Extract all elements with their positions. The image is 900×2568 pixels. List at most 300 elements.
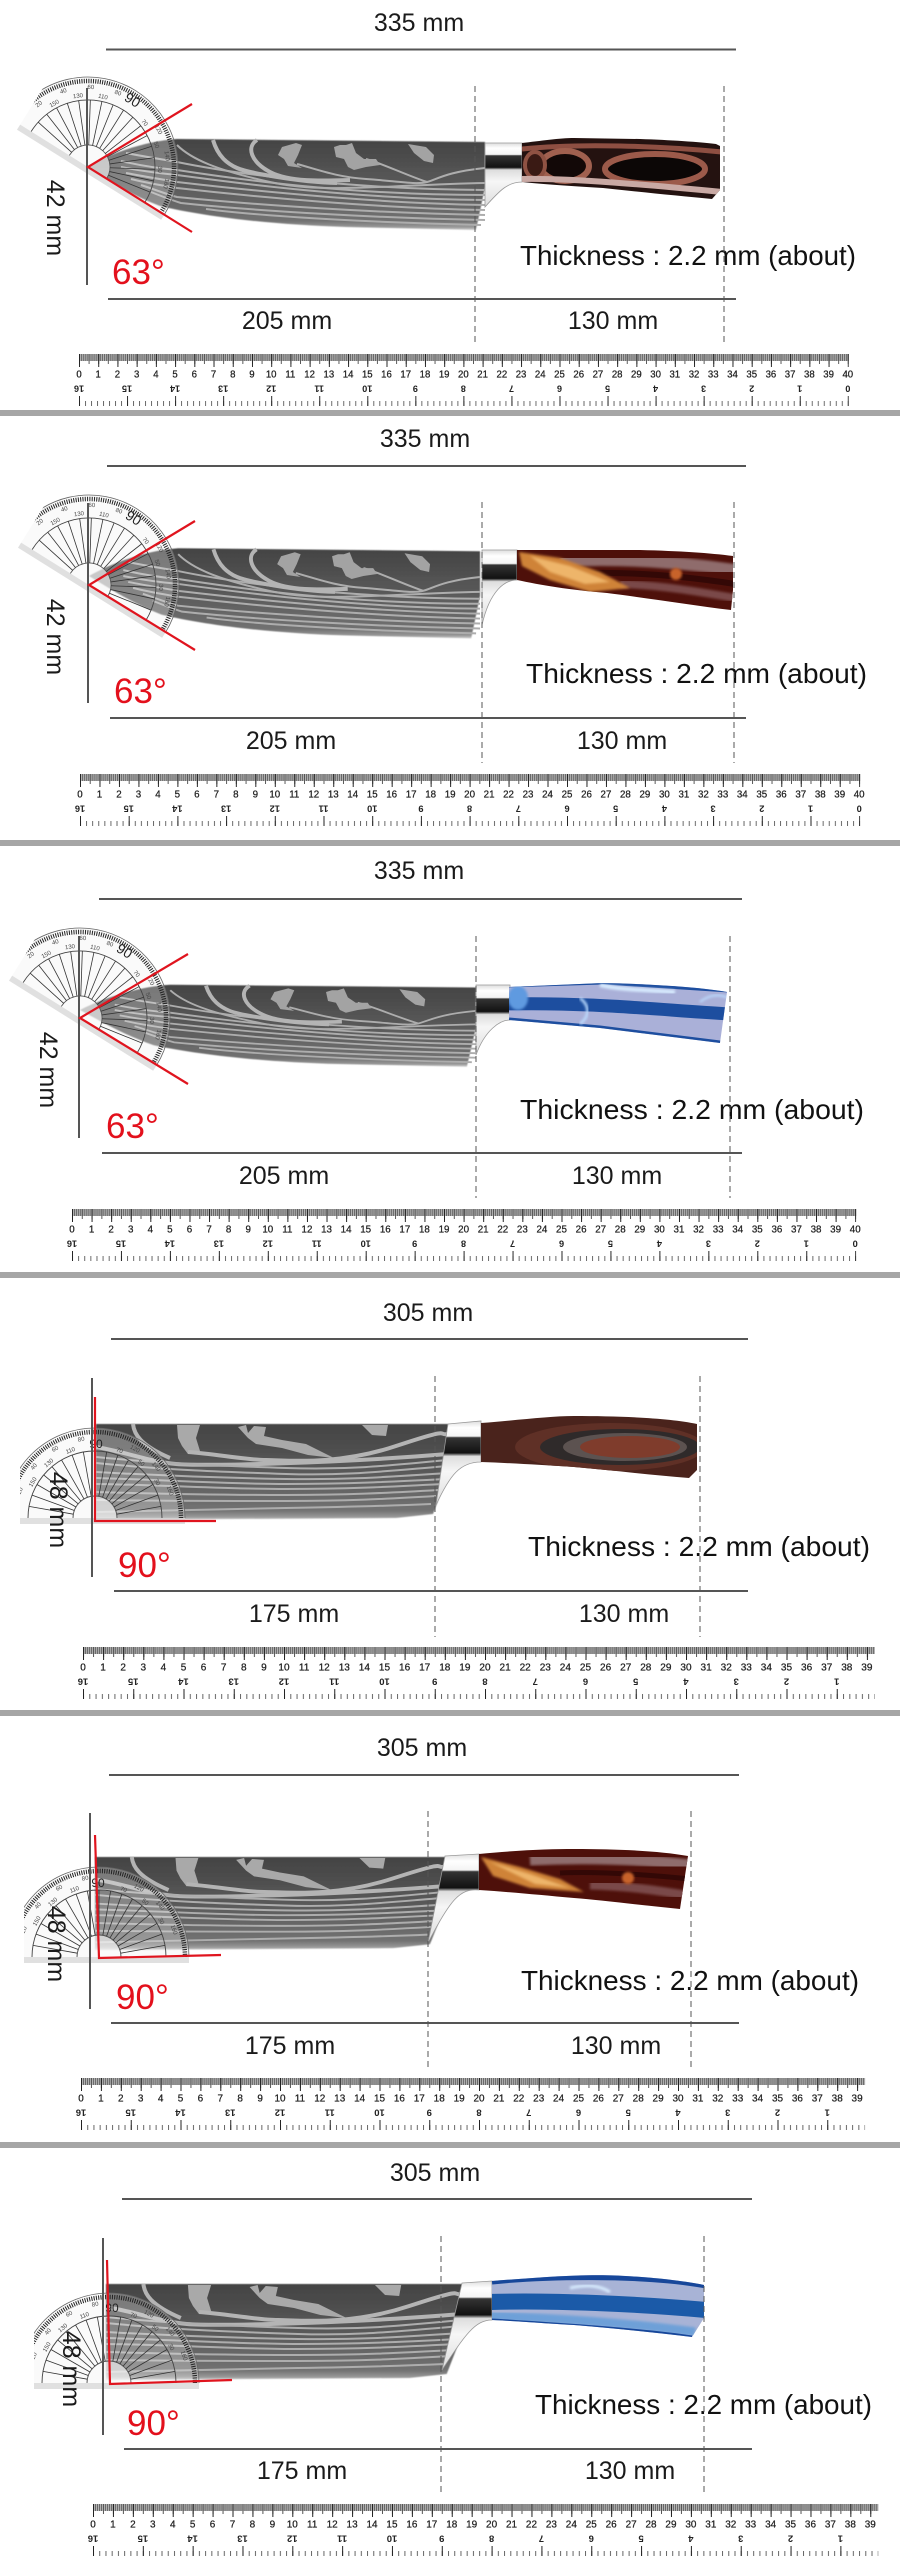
ruler: 16 xyxy=(380,1224,391,1236)
ruler: 14 xyxy=(164,1238,175,1250)
ruler: 19 xyxy=(454,2093,465,2105)
ruler: 18 xyxy=(419,1224,430,1236)
ruler: 7 xyxy=(509,383,514,394)
protractor label: 90 xyxy=(91,1876,105,1890)
ruler: 17 xyxy=(400,369,411,381)
ruler: 3 xyxy=(150,2519,156,2531)
panel: knife 6, cleaver with blue resin handle xyxy=(19,2159,878,2556)
ruler xyxy=(74,354,854,406)
ruler: 29 xyxy=(660,1663,672,1673)
ruler: 21 xyxy=(506,2519,518,2531)
heading: total length 335 mm: 335 mm xyxy=(380,425,470,453)
ruler: 5 xyxy=(608,1238,613,1250)
ruler: 36 xyxy=(766,369,777,381)
ruler: 1 xyxy=(97,789,102,801)
ruler: 21 xyxy=(477,369,488,381)
ruler: 15 xyxy=(362,369,373,381)
ruler: 36 xyxy=(805,2519,816,2531)
ruler: 37 xyxy=(821,1663,833,1673)
ruler: 6 xyxy=(210,2519,216,2531)
ruler: 2 xyxy=(115,369,120,381)
red angle lines xyxy=(89,521,195,650)
ruler: 40 xyxy=(842,369,854,381)
ruler: 38 xyxy=(804,369,815,381)
ruler: 9 xyxy=(245,1224,251,1236)
ruler: 24 xyxy=(553,2093,565,2105)
handle: wood xyxy=(522,138,720,199)
dashed guide lines xyxy=(482,502,734,763)
blade/handle length line xyxy=(114,1590,748,1592)
ruler: 13 xyxy=(321,1224,332,1236)
ruler: 2 xyxy=(116,789,122,801)
ruler: 8 xyxy=(461,383,466,394)
protractor xyxy=(5,1428,185,1524)
ruler: 12 xyxy=(279,1676,289,1686)
ruler: 13 xyxy=(221,803,231,814)
angle label: 90° xyxy=(116,1978,169,2017)
handle length label: 130 mm xyxy=(571,2032,661,2060)
ruler: 9 xyxy=(261,1663,267,1673)
ruler: 17 xyxy=(426,2519,438,2531)
handle: blue resin xyxy=(492,2275,704,2337)
ruler: 25 xyxy=(586,2519,597,2531)
blade/handle length line xyxy=(110,717,746,719)
ruler: 23 xyxy=(516,369,527,381)
ruler: 0 xyxy=(80,1663,86,1673)
blade length label: 205 mm xyxy=(239,1162,329,1190)
ruler: 27 xyxy=(626,2519,637,2531)
blade height line xyxy=(89,1813,91,2009)
ruler: 16 xyxy=(381,369,392,381)
ruler: 38 xyxy=(815,789,826,801)
ruler: 13 xyxy=(228,1676,239,1686)
ruler: 31 xyxy=(705,2519,717,2531)
ruler: 14 xyxy=(366,2519,378,2531)
ruler: 29 xyxy=(634,1224,646,1236)
ruler: 7 xyxy=(214,789,219,801)
ruler: 8 xyxy=(237,2093,243,2105)
ruler: 2 xyxy=(775,2106,780,2118)
ruler: 1 xyxy=(825,2106,830,2118)
dashed guide lines xyxy=(475,86,724,344)
ruler: 14 xyxy=(341,1224,352,1236)
ruler: 4 xyxy=(675,2106,681,2118)
ruler: 26 xyxy=(600,1663,612,1673)
ruler: 1 xyxy=(89,1224,95,1236)
ruler: 1 xyxy=(110,2519,116,2531)
ruler: 12 xyxy=(263,1238,273,1250)
ruler: 5 xyxy=(613,803,618,814)
blade height label: 42 mm xyxy=(34,1032,62,1108)
ruler: 7 xyxy=(539,2532,544,2544)
ruler: 21 xyxy=(493,2093,505,2105)
ruler: 24 xyxy=(536,1224,548,1236)
ruler: 35 xyxy=(746,369,758,381)
ruler: 5 xyxy=(181,1663,187,1673)
panel: knife 4, cleaver with wood handle xyxy=(5,1299,875,1699)
blade xyxy=(95,1857,448,1950)
ruler: 34 xyxy=(737,789,748,801)
ruler: 11 xyxy=(319,803,328,814)
red right-angle lines xyxy=(95,1835,221,1958)
ruler: 8 xyxy=(489,2532,494,2544)
ruler: 7 xyxy=(510,1238,515,1250)
ruler: 27 xyxy=(595,1224,606,1236)
ruler: 30 xyxy=(650,369,661,381)
ruler: 38 xyxy=(832,2093,843,2105)
ruler: 39 xyxy=(830,1224,842,1236)
ruler: 24 xyxy=(535,369,546,381)
ruler: 19 xyxy=(466,2519,478,2531)
protractor label: 90 xyxy=(123,507,145,529)
ruler: 28 xyxy=(640,1663,652,1673)
ruler: 11 xyxy=(307,2519,318,2531)
ruler: 6 xyxy=(557,383,562,394)
ruler: 14 xyxy=(343,369,354,381)
divider bar xyxy=(0,1710,900,1716)
ruler: 11 xyxy=(285,369,295,381)
ruler: 12 xyxy=(266,383,276,394)
panel: knife 3, chef knife with blue resin handle xyxy=(0,857,864,1261)
total length line xyxy=(109,1774,739,1776)
ruler: 32 xyxy=(689,369,699,381)
ruler: 12 xyxy=(319,1663,330,1673)
ruler: 5 xyxy=(626,2106,631,2118)
ruler: 11 xyxy=(312,1238,322,1250)
protractor label: 90 xyxy=(89,1437,103,1451)
ruler: 15 xyxy=(122,383,132,394)
ruler: 25 xyxy=(580,1663,592,1673)
ruler: 15 xyxy=(138,2532,148,2544)
ruler: 34 xyxy=(761,1663,772,1673)
ruler: 20 xyxy=(464,789,476,801)
blade height label: 42 mm xyxy=(41,180,69,256)
ruler xyxy=(76,2078,865,2130)
ruler: 28 xyxy=(620,789,631,801)
ruler: 9 xyxy=(418,803,423,814)
ruler: 7 xyxy=(526,2106,531,2118)
blade height label: 42 mm xyxy=(41,599,69,675)
ruler: 22 xyxy=(496,369,507,381)
ruler: 2 xyxy=(108,1224,114,1236)
ruler: 15 xyxy=(116,1238,126,1250)
heading: total length 305 mm: 305 mm xyxy=(377,1734,467,1762)
red right-angle lines xyxy=(107,2260,232,2384)
ruler: 31 xyxy=(669,369,680,381)
dashed guide lines xyxy=(435,1376,700,1637)
ruler: 3 xyxy=(734,1676,739,1686)
ruler: 25 xyxy=(573,2093,584,2105)
ruler: 13 xyxy=(347,2519,358,2531)
ruler: 15 xyxy=(386,2519,398,2531)
ruler: 33 xyxy=(708,369,719,381)
ruler: 17 xyxy=(406,789,417,801)
ruler: 38 xyxy=(841,1663,853,1673)
ruler: 16 xyxy=(78,1676,88,1686)
ruler xyxy=(88,2504,878,2556)
ruler: 7 xyxy=(206,1224,212,1236)
ruler: 1 xyxy=(808,803,813,814)
ruler: 17 xyxy=(414,2093,425,2105)
handle length label: 130 mm xyxy=(568,307,658,335)
ruler: 29 xyxy=(640,789,651,801)
ruler: 8 xyxy=(467,803,472,814)
blade xyxy=(96,1424,451,1520)
ruler: 6 xyxy=(201,1663,207,1673)
ruler: 26 xyxy=(581,789,592,801)
blade xyxy=(106,2284,465,2380)
blade height label: 48 mm xyxy=(57,2331,85,2407)
ruler xyxy=(78,1647,875,1699)
ruler: 1 xyxy=(797,383,802,394)
ruler: 37 xyxy=(791,1224,802,1236)
ruler: 13 xyxy=(328,789,339,801)
ruler: 20 xyxy=(458,1224,470,1236)
ruler: 32 xyxy=(698,789,709,801)
ruler: 4 xyxy=(153,369,159,381)
ruler: 13 xyxy=(225,2106,236,2118)
red angle lines xyxy=(88,104,192,232)
ruler: 4 xyxy=(652,383,658,394)
ruler: 14 xyxy=(177,1676,189,1686)
ruler: 5 xyxy=(175,789,181,801)
blade/handle length line xyxy=(108,298,736,300)
ruler: 5 xyxy=(190,2519,196,2531)
ruler: 11 xyxy=(325,2106,335,2118)
ruler: 23 xyxy=(517,1224,528,1236)
ruler: 9 xyxy=(253,789,259,801)
ruler: 30 xyxy=(659,789,670,801)
ruler: 12 xyxy=(302,1224,312,1236)
ruler: 10 xyxy=(278,1663,290,1673)
protractor xyxy=(19,2293,199,2389)
ruler: 0 xyxy=(90,2519,96,2531)
dashed guide lines xyxy=(476,936,730,1198)
ruler: 1 xyxy=(98,2093,104,2105)
ruler: 8 xyxy=(482,1676,488,1686)
ruler: 20 xyxy=(473,2093,485,2105)
ruler: 32 xyxy=(725,2519,737,2531)
ruler: 5 xyxy=(638,2532,644,2544)
protractor label: 90 xyxy=(122,89,144,111)
ruler: 3 xyxy=(725,2106,730,2118)
ruler: 32 xyxy=(712,2093,724,2105)
ruler: 1 xyxy=(804,1238,809,1250)
ruler: 6 xyxy=(576,2106,581,2118)
ruler: 4 xyxy=(158,2093,164,2105)
thickness label: Thickness : 2.2 mm (about) xyxy=(526,658,867,689)
ruler: 1 xyxy=(833,1676,839,1686)
protractor label: 90 xyxy=(105,2301,119,2315)
ruler: 38 xyxy=(845,2519,856,2531)
ruler: 14 xyxy=(347,789,359,801)
ruler: 15 xyxy=(124,803,134,814)
ruler: 21 xyxy=(500,1663,511,1673)
total length line xyxy=(106,48,736,50)
ruler: 24 xyxy=(560,1663,571,1673)
ruler: 20 xyxy=(479,1663,491,1673)
ruler: 13 xyxy=(334,2093,346,2105)
ruler: 2 xyxy=(118,2093,124,2105)
ruler: 9 xyxy=(412,1238,417,1250)
ruler: 4 xyxy=(683,1676,689,1686)
ruler: 2 xyxy=(130,2519,136,2531)
ruler: 8 xyxy=(226,1224,232,1236)
ruler: 33 xyxy=(732,2093,744,2105)
ruler: 6 xyxy=(198,2093,204,2105)
blade height label: 48 mm xyxy=(44,1472,72,1548)
ruler: 13 xyxy=(324,369,335,381)
ruler: 9 xyxy=(432,1676,437,1686)
ruler: 11 xyxy=(282,1224,293,1236)
ruler: 16 xyxy=(406,2519,418,2531)
ruler: 11 xyxy=(314,383,324,394)
ruler: 10 xyxy=(374,2106,385,2118)
ruler: 36 xyxy=(801,1663,813,1673)
ruler: 25 xyxy=(562,789,573,801)
ruler: 40 xyxy=(854,789,865,801)
ruler: 10 xyxy=(367,803,377,814)
ruler: 30 xyxy=(680,1663,692,1673)
ruler: 14 xyxy=(175,2106,186,2118)
blade length label: 175 mm xyxy=(249,1600,339,1628)
ruler: 34 xyxy=(752,2093,764,2105)
ruler: 26 xyxy=(573,369,585,381)
ruler: 4 xyxy=(656,1238,662,1250)
angle label: 90° xyxy=(118,1546,171,1585)
ruler: 6 xyxy=(564,803,570,814)
ruler: 13 xyxy=(218,383,228,394)
ruler: 7 xyxy=(533,1676,538,1686)
blade xyxy=(80,985,476,1067)
ruler: 8 xyxy=(250,2519,256,2531)
ruler: 5 xyxy=(167,1224,173,1236)
ruler: 12 xyxy=(308,789,319,801)
ruler: 24 xyxy=(566,2519,577,2531)
ruler: 3 xyxy=(706,1238,711,1250)
ruler: 10 xyxy=(387,2532,397,2544)
ruler: 6 xyxy=(192,369,198,381)
ruler: 40 xyxy=(850,1224,861,1236)
ruler: 16 xyxy=(394,2093,405,2105)
ruler: 26 xyxy=(606,2519,617,2531)
ruler: 25 xyxy=(554,369,565,381)
ruler: 5 xyxy=(172,369,178,381)
ruler: 0 xyxy=(845,383,850,394)
ruler: 15 xyxy=(360,1224,372,1236)
ruler: 39 xyxy=(861,1663,873,1673)
ruler: 5 xyxy=(632,1676,638,1686)
ruler: 30 xyxy=(654,1224,665,1236)
ruler: 13 xyxy=(339,1663,350,1673)
thickness label: Thickness : 2.2 mm (about) xyxy=(535,2389,872,2420)
ruler: 36 xyxy=(771,1224,783,1236)
total length line xyxy=(107,465,746,467)
ruler: 0 xyxy=(76,369,82,381)
ruler: 22 xyxy=(513,2093,525,2105)
blade height line xyxy=(78,936,80,1138)
ruler: 23 xyxy=(546,2519,557,2531)
ruler: 22 xyxy=(526,2519,537,2531)
ruler: 2 xyxy=(120,1663,126,1673)
bolster xyxy=(442,2281,492,2370)
thickness label: Thickness : 2.2 mm (about) xyxy=(521,1965,859,1996)
ruler: 7 xyxy=(516,803,521,814)
ruler: 17 xyxy=(419,1663,431,1673)
total length line xyxy=(122,2198,752,2200)
ruler xyxy=(67,1209,861,1261)
ruler: 26 xyxy=(576,1224,587,1236)
ruler: 38 xyxy=(811,1224,822,1236)
bolster xyxy=(485,143,522,207)
thickness label: Thickness : 2.2 mm (about) xyxy=(528,1531,870,1562)
ruler: 15 xyxy=(379,1663,391,1673)
ruler: 11 xyxy=(295,2093,306,2105)
ruler: 18 xyxy=(420,369,431,381)
panel: knife 1, chef knife with wood handle xyxy=(8,9,856,406)
ruler: 1 xyxy=(96,369,101,381)
ruler: 18 xyxy=(434,2093,445,2105)
angle label: 63° xyxy=(112,253,165,292)
blade length label: 175 mm xyxy=(257,2457,347,2485)
ruler: 27 xyxy=(593,369,603,381)
ruler: 14 xyxy=(354,2093,366,2105)
protractor label: 90 xyxy=(114,940,136,962)
ruler: 35 xyxy=(756,789,768,801)
ruler: 21 xyxy=(478,1224,489,1236)
ruler: 35 xyxy=(772,2093,783,2105)
ruler: 2 xyxy=(788,2532,793,2544)
protractor xyxy=(18,494,180,638)
divider bar xyxy=(0,840,900,846)
ruler: 7 xyxy=(211,369,216,381)
ruler: 19 xyxy=(439,1224,450,1236)
ruler: 26 xyxy=(593,2093,604,2105)
ruler: 16 xyxy=(74,383,84,394)
ruler: 37 xyxy=(825,2519,836,2531)
total length line xyxy=(99,898,742,900)
divider bar xyxy=(0,2142,900,2148)
dashed guide lines xyxy=(428,1811,691,2068)
ruler: 36 xyxy=(792,2093,803,2105)
ruler: 12 xyxy=(287,2532,298,2544)
blade height line xyxy=(86,88,88,285)
ruler: 32 xyxy=(693,1224,704,1236)
ruler: 10 xyxy=(262,1224,274,1236)
ruler: 10 xyxy=(361,1238,371,1250)
ruler: 5 xyxy=(178,2093,184,2105)
ruler: 14 xyxy=(171,803,183,814)
protractor xyxy=(9,928,170,1070)
handle length label: 130 mm xyxy=(585,2457,675,2485)
ruler: 31 xyxy=(674,1224,685,1236)
handle length label: 130 mm xyxy=(579,1600,669,1628)
ruler: 19 xyxy=(439,369,450,381)
ruler: 8 xyxy=(233,789,239,801)
blade length label: 205 mm xyxy=(246,727,336,755)
ruler: 18 xyxy=(439,1663,451,1673)
ruler: 36 xyxy=(776,789,787,801)
ruler: 4 xyxy=(148,1224,154,1236)
ruler: 39 xyxy=(823,369,834,381)
ruler: 16 xyxy=(67,1238,77,1250)
ruler: 19 xyxy=(459,1663,471,1673)
blade/handle length line xyxy=(124,2448,752,2450)
heading: total length 305 mm: 305 mm xyxy=(390,2159,480,2187)
ruler: 9 xyxy=(249,369,255,381)
protractor xyxy=(17,76,178,220)
ruler: 9 xyxy=(257,2093,263,2105)
